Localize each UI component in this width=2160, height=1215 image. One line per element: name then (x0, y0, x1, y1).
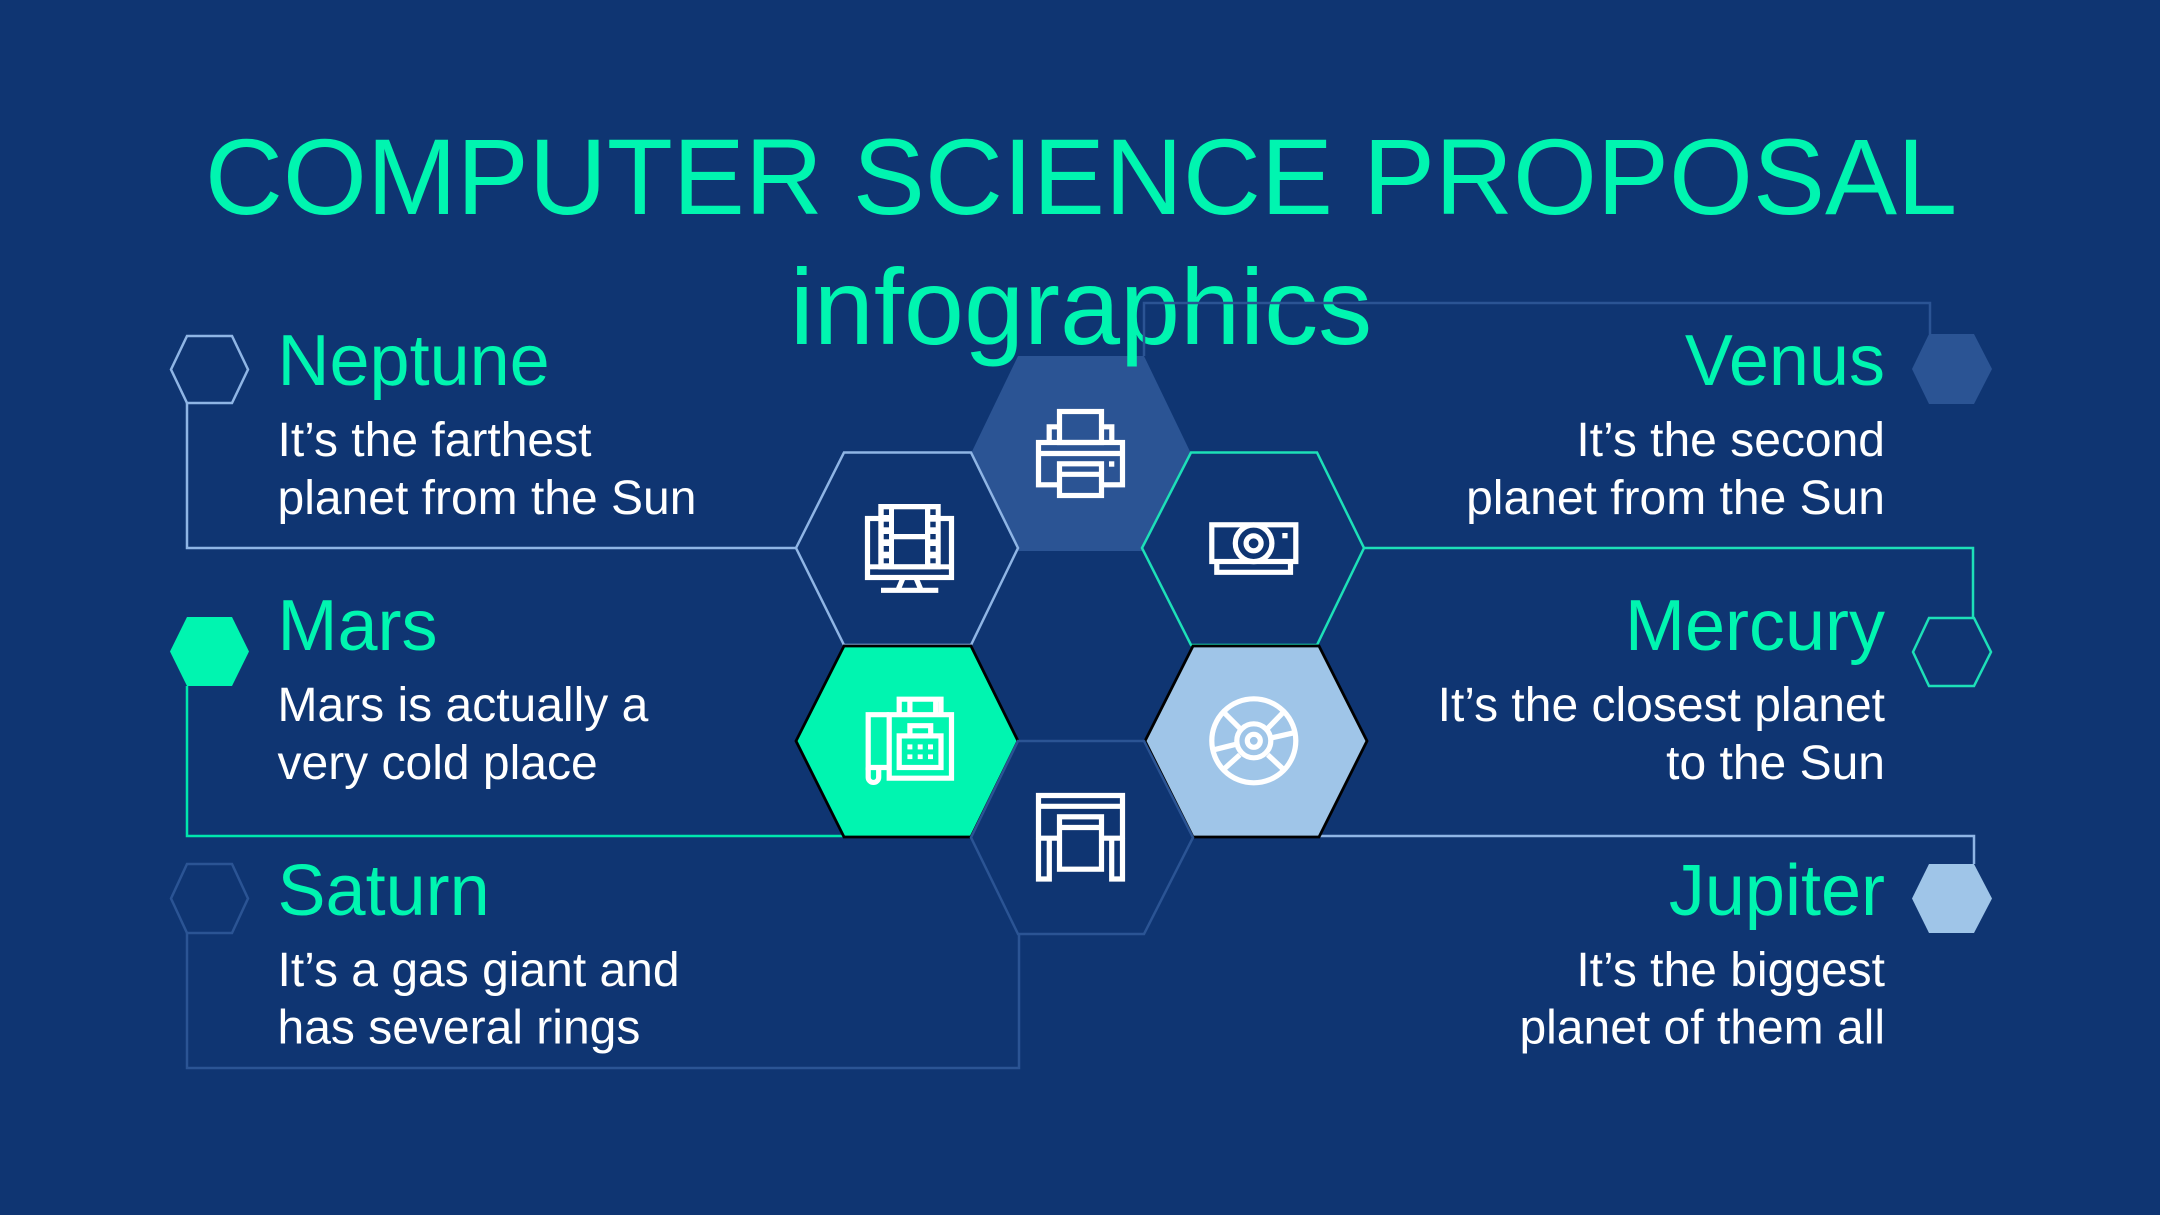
heading: Mercury: Mercury (1625, 586, 1885, 666)
connector: Venus to printer hexagon (1144, 303, 1930, 356)
hexagon: fax (796, 646, 1018, 837)
connector: Mars to fax hexagon (187, 686, 844, 836)
text: Mars description: Mars is actually a (278, 679, 649, 732)
heading: Venus: Venus (1685, 321, 1885, 401)
text: Jupiter description: It’s the biggest (1576, 944, 1885, 997)
hexagon: printer (971, 356, 1191, 551)
icon: fax machine (868, 699, 952, 782)
text: Mercury description: to the Sun (1666, 737, 1885, 790)
icon: plotter (1038, 796, 1122, 879)
marker hexagon: Mars (170, 617, 249, 686)
icon: printer (1038, 412, 1122, 496)
connector: Jupiter to disc hexagon (1319, 836, 1974, 864)
title: infographics (790, 246, 1372, 367)
text: Jupiter description: planet of them all (1519, 1002, 1885, 1054)
text: Venus description: planet from the Sun (1466, 472, 1885, 525)
text: Mercury description: It’s the closest planet (1438, 679, 1885, 732)
text: Saturn description: has several rings (278, 1002, 640, 1054)
text: Neptune description: It’s the farthest (278, 414, 591, 467)
panel: Saturn (171, 851, 680, 1054)
heading: Saturn: Saturn (278, 851, 490, 931)
marker hexagon: Venus (1912, 334, 1992, 404)
panel: Jupiter (1519, 851, 1992, 1054)
marker hexagon: Mercury (1913, 618, 1991, 686)
icon: projector (1212, 525, 1296, 572)
panel: Mercury (1438, 586, 1991, 790)
connector: Saturn to plotter hexagon (187, 933, 1019, 1068)
heading: Jupiter: Jupiter (1669, 851, 1885, 931)
marker hexagon: Jupiter (1912, 864, 1992, 933)
panel: Venus (1466, 321, 1992, 525)
panel: Mars (170, 586, 649, 790)
marker hexagon: Neptune (171, 336, 248, 403)
hexagon: projector (1142, 452, 1364, 645)
hexagon: film monitor (796, 452, 1018, 645)
icon: film on monitor (868, 504, 952, 590)
marker hexagon: Saturn (171, 864, 248, 933)
text: Venus description: It’s the second (1576, 414, 1885, 467)
panel: Neptune (171, 321, 696, 525)
text: Saturn description: It’s a gas giant and (278, 944, 680, 997)
icon: disc (1212, 699, 1296, 783)
hexagon: plotter (971, 741, 1193, 934)
heading: Mars: Mars (278, 586, 438, 666)
hexagon: disc (1145, 646, 1367, 837)
title: COMPUTER SCIENCE PROPOSAL (205, 116, 1957, 237)
title (205, 116, 1957, 367)
heading: Neptune: Neptune (278, 321, 550, 401)
text: Mars description: very cold place (278, 737, 598, 790)
connector: Neptune to film hexagon (187, 403, 796, 548)
connector: Mercury to projector hexagon (1364, 548, 1973, 618)
text: Neptune description: planet from the Sun (278, 472, 696, 525)
